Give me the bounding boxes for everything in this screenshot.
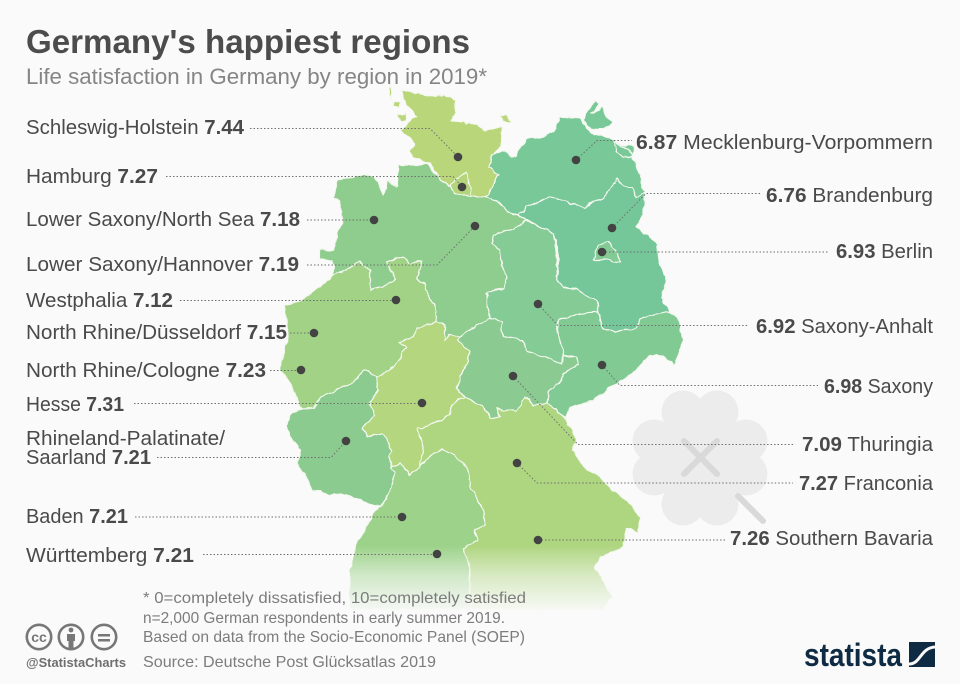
left region labels — [26, 117, 300, 567]
region: Hesse — [362, 320, 470, 475]
statista logo: statista — [804, 637, 902, 673]
left region labels: Baden 7.21 — [26, 506, 128, 528]
region: Berlin — [593, 242, 621, 263]
left region labels: Rhineland-Palatinate/ — [26, 428, 225, 450]
right region labels: 6.92 Saxony-Anhalt — [756, 316, 933, 338]
region: Brandenburg — [518, 179, 669, 332]
region: Thuringia — [457, 318, 578, 418]
left region labels: Lower Saxony/North Sea 7.18 — [26, 209, 300, 231]
right region labels: 6.93 Berlin — [836, 241, 933, 263]
right region labels — [636, 132, 934, 550]
left region labels: Hesse 7.31 — [26, 394, 124, 416]
region: North Rhine-Westphalia — [280, 257, 437, 408]
region: Lower Saxony — [320, 163, 527, 340]
left region labels: Saarland 7.21 — [26, 447, 151, 469]
left region labels: Westphalia 7.12 — [26, 290, 173, 312]
region: Saxony-Anhalt — [487, 221, 598, 364]
left region labels: Hamburg 7.27 — [26, 166, 158, 188]
region: Bavaria (Franconia and Southern Bavaria) — [417, 397, 642, 610]
right region labels: 6.87 Mecklenburg-Vorpommern — [636, 132, 933, 154]
left region labels: Schleswig-Holstein 7.44 — [26, 117, 245, 139]
footnotes: Based on data from the Socio-Economic Panel (SOEP) — [143, 629, 525, 646]
icon: creative commons licence badges — [27, 625, 116, 649]
left region labels: North Rhine/Düsseldorf 7.15 — [26, 322, 287, 344]
footnotes — [143, 590, 526, 646]
footnotes: n=2,000 German respondents in early summer 2019. — [143, 610, 505, 627]
region: Mecklenburg-Vorpommern — [485, 100, 645, 215]
region marker dots — [297, 153, 616, 558]
right region labels: 7.26 Southern Bavaria — [730, 528, 934, 550]
left region labels: North Rhine/Cologne 7.23 — [26, 360, 266, 382]
region: Hamburg — [449, 172, 471, 195]
region: Baden-Württemberg — [350, 450, 485, 610]
footnotes: * 0=completely dissatisfied, 10=completely satisfied — [143, 590, 526, 607]
icon: creative commons licence badges: cc — [31, 629, 47, 645]
right region labels: 6.98 Saxony — [824, 376, 933, 398]
title: Germany's happiest regions — [26, 23, 470, 60]
right region labels: 7.27 Franconia — [799, 473, 934, 495]
region: Saxony — [547, 312, 683, 418]
icon: four-leaf clover with magnifier stem — [632, 390, 768, 526]
right region labels: 6.76 Brandenburg — [766, 185, 933, 207]
subtitle: Life satisfaction in Germany by region in 2019* — [26, 64, 487, 89]
source: Source: Deutsche Post Glücksatlas 2019 — [143, 654, 436, 671]
left region labels: Lower Saxony/Hannover 7.19 — [26, 254, 299, 276]
map of Germany by region — [280, 85, 683, 610]
left region labels: Württemberg 7.21 — [26, 545, 194, 567]
right region labels: 7.09 Thuringia — [802, 434, 934, 456]
leader lines — [134, 128, 828, 554]
handle: @StatistaCharts — [26, 655, 126, 670]
region: Rhineland-Palatinate and Saarland — [287, 370, 395, 507]
fade over southern edge of map — [310, 545, 650, 615]
region: Schleswig-Holstein — [389, 85, 512, 197]
